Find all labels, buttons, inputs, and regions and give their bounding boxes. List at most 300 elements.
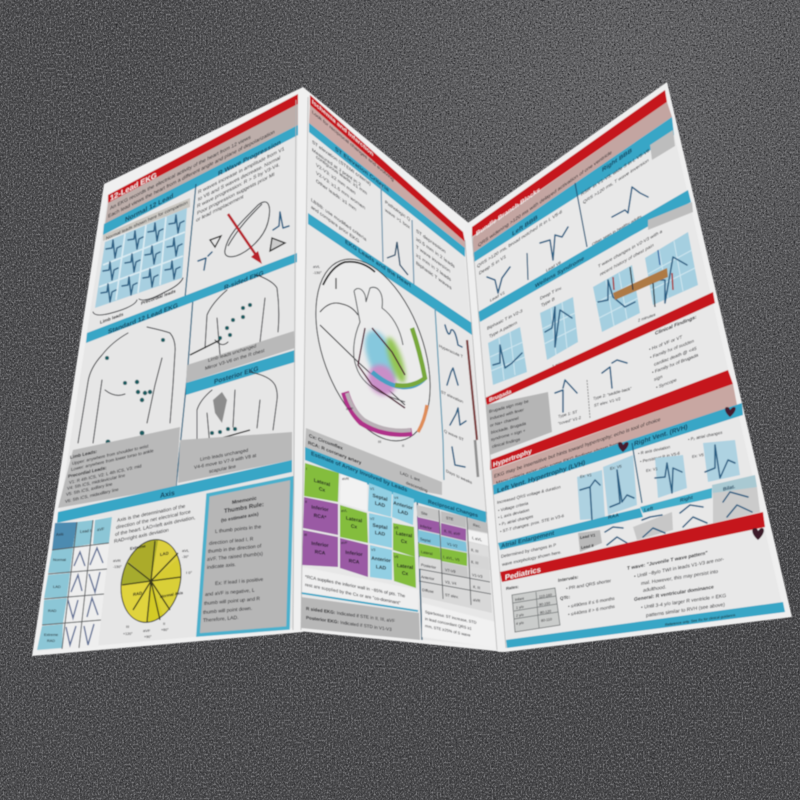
callout: mnemonic thumbs rule: (to estimate axis) [221, 511, 259, 523]
chart: lead territory grid: Lateral [314, 478, 331, 488]
text: limb and precordial lead placement: Precordial Leads: [68, 465, 107, 479]
heading band: Atrial Enlargement: Atrial Enlargement [501, 530, 554, 550]
text: atrial enlargement description: Determined by changes in P [501, 542, 556, 559]
text: wellens criteria: T wave changes in V2-V3 with a [598, 229, 662, 270]
icon: green lateral band [395, 328, 425, 386]
heading band: coronary circulation [308, 213, 472, 335]
table: axis lead I and aVF: RAD [48, 608, 57, 613]
heading: QRS and ST section banner: Look for reciprocal changes and evolving [312, 110, 394, 183]
text: normal 12 lead note: Normal leads shown here for comparison [106, 200, 188, 241]
heading band: Atrial Enlargement [498, 475, 757, 550]
chart: lead territory grid: aVF [341, 541, 348, 545]
diagram: posterior torso placement [190, 372, 277, 447]
table: pediatrics rates: 60-110 [541, 617, 552, 623]
callout: mnemonic thumbs rule: Mnemonic [232, 496, 257, 506]
text: RCA footnote [301, 567, 419, 611]
chart: lead territory grid: RCA [349, 558, 360, 566]
diagram: heart with lead planes: III [378, 439, 381, 444]
chart: axis wheel: aVR [113, 558, 121, 563]
text: Brugada description: clinical findings [492, 437, 520, 449]
text: Brugada clinical findings: sign [654, 374, 663, 383]
table: reciprocal changes: Inferior [420, 524, 433, 531]
text: R-sided note: Limb leads unchanged [208, 343, 257, 364]
chart: axis wheel: I 0° [186, 570, 192, 575]
table: reciprocal changes: STE [446, 516, 454, 522]
text: LVH criteria: • Voltage criteria [498, 500, 529, 513]
wave: Brugada types [555, 360, 632, 426]
icon: heart right [725, 407, 736, 417]
chart: axis wheel: aVF [143, 628, 151, 633]
callout: mnemonic thumbs rule: thumb will point down. [203, 606, 252, 616]
chart: lead territory grid: III [304, 533, 307, 537]
heading band: LBBB and RBBB: Left BBB [512, 214, 538, 238]
heading band: LVH and RVH [493, 403, 743, 495]
text: limb and precordial lead placement: Lower: anywhere from lower torso to ankle [71, 448, 154, 472]
table: pediatrics rates: 1 y/o [516, 605, 524, 610]
text: ST criteria list: contiguous leads: ≥1 mm [316, 154, 367, 197]
wave: Brugada types: Type 1: ST [558, 409, 578, 419]
icon: heart pediatrics [752, 528, 764, 540]
text: LVH criteria: • P₂ atrial changes [499, 514, 533, 527]
text and wave: LBBB: QRS >120 ms, broad notched R in I, V5-6 [477, 209, 562, 270]
panel: middle fold of card [294, 87, 505, 652]
chart: lead territory grid: RCA* [314, 513, 326, 521]
text: R-sided note: Mirror V3-V6 on the R chest [205, 348, 265, 372]
table: reciprocal changes: Rec. [473, 523, 481, 529]
text: Brugada description [486, 392, 552, 455]
chart: axis wheel: +90° [144, 635, 152, 639]
divider [632, 443, 642, 503]
chart: lead territory grid: Lateral [346, 516, 363, 525]
text: Brugada description: or Na+ channel [490, 415, 519, 428]
table: pediatrics rates: 80-120 [540, 609, 551, 615]
callout: mnemonic thumbs rule: thumb will point up and R [204, 596, 260, 607]
table: reciprocal changes: ST elev. [445, 593, 459, 599]
icon: orange arc [418, 405, 427, 432]
chart: axis wheel: aVL [182, 548, 190, 553]
heading band: Posterior EKG: Posterior EKG [214, 366, 258, 386]
heading band: reciprocal changes: Reciprocal Changes [428, 499, 478, 519]
text and wave: LBBB [477, 209, 568, 303]
heading band: Normal 12 Lead and R Wave Progression: R Wave Progression [218, 139, 281, 178]
heading: Hypertrophy [490, 370, 733, 470]
table: reciprocal changes: Lateral [421, 550, 433, 556]
table: axis lead I and aVF [37, 517, 112, 650]
text: reciprocal footnote: mm, STE ≥25% of S wave [425, 623, 471, 638]
wave: atrial morphology table [605, 487, 760, 545]
heading: Brugada: Brugada [489, 389, 512, 404]
table: reciprocal changes: Diffuse [422, 588, 434, 594]
chart: RVH grids: Ex: V5 [692, 452, 704, 459]
folded reference card [32, 82, 792, 656]
chart: lead territory grid: V6 [394, 555, 398, 559]
chart: ECG grid A: 1 minute [500, 384, 516, 395]
chart: lead territory grid: Inferior [311, 541, 329, 549]
chart: lead territory grid: aVL [341, 509, 347, 513]
text: LVH criteria [497, 484, 565, 534]
heading: Hypertrophy: Hypertrophy [493, 448, 532, 469]
heading band: ischemia subsections: ST Elevation Criteria [335, 146, 389, 194]
heading: 12-Lead EKG [105, 94, 298, 224]
heading band: LVH and RVH: Left Vent. Hypertrophy (LVH) [497, 459, 585, 495]
diagram: heart with depolarization arrow [198, 202, 289, 270]
chart: normal 12 lead waveforms grid: Precordial leads [141, 288, 176, 306]
callout: mnemonic thumbs rule: thumb in the direction of [208, 543, 262, 555]
heading: bundle branch block banner [472, 90, 672, 253]
chart: axis wheel: +120° [123, 632, 133, 636]
chart: lead territory grid: Inferior [345, 550, 363, 558]
text: RVH criteria: • P₂ atrial changes [688, 430, 722, 442]
chart: ECG grid B [540, 297, 578, 369]
heading band: Atrial Enlargement: Right [680, 495, 693, 504]
text: Brugada clinical findings: • Hx of VF or VT [649, 334, 682, 353]
callout: mnemonic thumbs rule: and aVF is negative, L [205, 588, 255, 598]
heading band: Axis [57, 460, 292, 523]
text: pediatric intervals: • ≤440ms if > 6 months [568, 604, 616, 617]
icon: heart anatomy outline [354, 287, 425, 408]
heading: bundle branch block banner: QRS widening >120 ms with delayed activation of one ventricle [478, 150, 612, 249]
text: pediatric T waves and dominance: • Until 3-4 y/o larger R ventricle = EKG [641, 593, 726, 611]
text: hypertrophy note: EKG may be insensitive but hints toward hypertrophy; echo is tool of choice [494, 417, 660, 480]
fold shading strips [293, 97, 506, 650]
heading band: Axis: Axis [160, 490, 175, 500]
dividers [527, 183, 587, 280]
chart: lead territory grid: Cx [402, 571, 408, 577]
table: axis lead I and aVF: Extreme [44, 633, 58, 637]
text: RCA footnote: *RCA supplies the inferior wall in ~85% of pts. The [305, 574, 406, 599]
table: reciprocal changes: II, III [471, 560, 478, 565]
text: ST criteria list: ST elevation (STEMI criteria) [312, 139, 371, 188]
text and wave: LBBB: Deep S in V1 [479, 254, 506, 277]
text: hypertrophy note: Many criteria exist; only some EKG findings shown here [496, 441, 620, 487]
chart: lead territory grid: LAD [375, 530, 385, 538]
heading band: Normal 12 Lead and R Wave Progression [103, 125, 298, 235]
icon: magenta inferior arc [345, 392, 412, 433]
wave: Brugada types: ST elev. V1-V2 [594, 396, 621, 408]
chart: axis wheel: LAD [160, 551, 169, 557]
text and wave: RBBB [581, 148, 650, 247]
text: limb and precordial lead placement: V1: R 4th ICS, V2: L 4th ICS, V3: mid [69, 463, 142, 485]
diagram: heart with lead planes: II [402, 443, 404, 448]
footer band [506, 602, 785, 648]
table: axis lead I and aVF: aVF [97, 526, 105, 532]
heading band: Atrial Enlargement: Bilat. [723, 484, 736, 493]
chart: lead territory grid: V2 [370, 517, 374, 521]
text: LVH criteria: • L axis deviation [498, 507, 530, 520]
text: axis definition: RAD=right axis deviation [114, 527, 169, 545]
chart: ECG grid C [593, 265, 640, 332]
text: ST depression subsection [416, 228, 455, 292]
callout: mnemonic thumbs rule: Therefore, LAD. [203, 615, 239, 624]
chart: normal 12 lead waveforms grid [93, 208, 187, 325]
heading: QRS and ST section banner: Ischemia and Infarction [312, 99, 373, 158]
chart: lead territory grid: LAD [398, 509, 408, 518]
text: right sided and posterior note [301, 597, 420, 640]
heading band: Standard 12 Lead and R-sided EKG [86, 253, 297, 343]
table: reciprocal changes [417, 505, 492, 613]
chart: axis wheel: Extreme [130, 543, 146, 551]
text: abbreviations: Cx: Circumflex [309, 433, 343, 452]
text: pediatric T waves and dominance: adulthood. [643, 584, 666, 594]
heading band: Standard 12 Lead and R-sided EKG: R-sided EKG [224, 270, 264, 292]
table: pediatrics rates: Rates: [506, 584, 519, 591]
text: pediatric intervals: • PR and QRS shorter [566, 578, 611, 591]
text: RVH criteria [638, 430, 722, 464]
callout: mnemonic thumbs rule: direction of lead I, R [209, 536, 254, 547]
heading band: Atrial Enlargement: RAA [608, 512, 619, 521]
table: pediatrics rates: 4 y/o [516, 621, 524, 626]
text: R wave progression description: or lead misplacement [196, 194, 244, 224]
text and wave: LBBB: Lead V1 [490, 289, 505, 303]
text: ST depression subsection: ST depression [416, 228, 446, 255]
text: axis definition: Axis is the determination of the [117, 503, 185, 524]
text: ST depression subsection: ≥0.5 mm in 2 leads [416, 236, 455, 270]
text: pediatric T waves and dominance: • Until ~8y/o TWI in leads V1-V3 are nor- [634, 557, 724, 580]
text: R wave progression description: Poor progression suggests prior MI [197, 172, 275, 217]
table: axis lead I and aVF: Normal [53, 557, 66, 562]
chart: axis wheel: -30° [182, 555, 189, 559]
wave: Brugada types: Type 2: "saddle-back" [593, 386, 632, 401]
chart: lead territory grid: V1 [370, 487, 374, 491]
chart: axis wheel [112, 538, 192, 638]
heading: Pediatrics: Pediatrics [505, 565, 541, 582]
text: atrial enlargement description: Lead V1 [580, 532, 596, 540]
text and wave: RBBB: RSR' in V1-V3, wide S in I, V5-V6 [581, 148, 650, 198]
chart: lead territory grid: Cx [351, 523, 357, 531]
text: pediatric T waves and dominance: patterns similar to RVH (see above) [646, 602, 725, 619]
chart: lead territory grid: Cx [319, 486, 325, 494]
diagram: heart with lead planes [294, 244, 452, 456]
panel: ST morphology sub-column [435, 308, 478, 485]
text: posterior note: scapular line [209, 464, 236, 475]
text: wellens criteria [487, 229, 662, 339]
chart: lead territory grid: RCA [315, 549, 326, 557]
table: reciprocal changes: II, III [473, 585, 480, 590]
text: abbreviations: descending [406, 480, 428, 493]
heading band: ischemia subsections [309, 123, 465, 257]
text: RVH criteria: • Persistent R in V5-6 [640, 450, 681, 464]
callout: mnemonic thumbs rule: L thumb points in the [215, 524, 261, 535]
text: right sided and posterior note: R sided EKG: Indicated if STE in II, III, aVF [306, 606, 395, 624]
table: reciprocal changes: II, III, aVF [444, 529, 461, 537]
heading band: estimate of artery involved: Estimate of Artery Involved by Leads [311, 451, 407, 494]
text: limb and precordial lead placement: V6: 5th ICS, midaxillary line [65, 487, 119, 504]
text: posterior note: Limb leads unchanged [200, 448, 248, 463]
text: axis definition: direction of the net electrical force [116, 509, 191, 531]
heading band: Posterior EKG [186, 350, 295, 395]
text: limb and precordial lead placement: Limb Leads: [70, 449, 98, 460]
heading band: LBBB and RBBB: Right BBB [602, 147, 632, 174]
text: abbreviations [305, 428, 442, 495]
text: ST criteria list: and compare prior EKG [311, 204, 359, 245]
arrow: evolution over time [467, 340, 478, 477]
table: reciprocal changes: Anterior [421, 575, 435, 581]
heading band: reciprocal changes [415, 490, 487, 523]
dividers [381, 185, 414, 288]
text: reciprocal footnote: Sgarbossa: ST increase, STD [425, 609, 477, 625]
table: axis lead I and aVF: Axis [56, 531, 64, 537]
text: Brugada description: Brugada sign may be [489, 398, 529, 414]
text: R wave progression description: R waves increase in amplitude from V1 [198, 146, 284, 196]
callout: mnemonic thumbs rule: indicate axis. [207, 562, 236, 571]
heading band: Normal 12 Lead and R Wave Progression: Normal 12 Lead [125, 193, 173, 224]
panel: right fold of card [465, 82, 792, 652]
panel: ST morphology sub-column: Q wave ST [444, 428, 464, 442]
heading band: Atrial Enlargement: Left [644, 506, 653, 514]
text and wave: Q wave subsection: wave >1 box [385, 207, 410, 231]
chart: normal 12 lead waveforms grid: Limb leads [100, 311, 124, 325]
chart: ECG grid B: 1 minute [552, 358, 568, 369]
text: pediatric intervals [558, 574, 616, 617]
table: reciprocal changes: aVR [473, 598, 481, 603]
text: limb and precordial lead placement [58, 427, 180, 508]
text: ST depression subsection: ≥1 mm in 2 leads [416, 252, 451, 283]
chart: ECG grid D [638, 232, 698, 323]
chart: LVH grids [577, 455, 637, 520]
text: Brugada description: induced with fever [490, 407, 524, 421]
text: Brugada description: blockade. Brugada [491, 421, 527, 435]
text: atrial enlargement description: wave morphology shown here. [502, 549, 562, 567]
table: pediatrics rates: Infant [515, 597, 524, 602]
diagram: heart with lead planes: aVL [313, 264, 321, 269]
heading band: Standard 12 Lead and R-sided EKG: Standard 12 Lead EKG [108, 302, 178, 336]
panel: ST morphology sub-column: ST elevation [441, 389, 464, 405]
divider [176, 184, 196, 487]
chart: ECG grid D: 2 minutes [638, 312, 655, 323]
wave: Brugada types: "coved" V1-2 [558, 415, 582, 426]
chart: axis wheel: II [163, 621, 165, 626]
chart: LVH grids: Ex: V1 [580, 472, 592, 479]
text: ST criteria list: Other leads: ≥1 mm [316, 178, 356, 213]
heading band: LBBB and RBBB [473, 117, 675, 262]
text: LVH criteria: • ST-T changes: prox. STE in V3-6 [500, 513, 565, 534]
diagram: heart with lead planes: -150° [313, 271, 322, 275]
text: Brugada clinical findings: cardiac death @ <45 [654, 346, 697, 368]
text: pediatric intervals: QTc: [560, 594, 571, 601]
chart: ECG grid A [488, 327, 527, 395]
chart: lead territory grid: Inferior [311, 505, 329, 514]
text: pediatric intervals: • ≤490ms if ≤ 6 months [568, 596, 615, 609]
panel: ST morphology sub-column: Days to weeks [446, 468, 472, 485]
heading band: coronary circulation: EKG Leads and the Heart [345, 238, 411, 289]
chart: axis wheel: -150° [113, 565, 122, 569]
text: R wave progression description [196, 146, 284, 224]
table: reciprocal changes: V1-V2 [447, 542, 458, 548]
diagram: standard 12 lead torso placement [78, 327, 175, 444]
chart: lead territory grid: Lateral [396, 531, 413, 540]
table: reciprocal changes: V7-V9 [445, 568, 456, 574]
text: ST depression subsection: Biphasic T waves [416, 260, 452, 292]
chart: axis wheel: III [126, 624, 129, 629]
callout: mnemonic thumbs rule [198, 478, 292, 635]
heading band: LVH and RVH: Right Vent. (RVH) [634, 424, 688, 448]
icon: heart [618, 442, 629, 452]
chart: lead territory grid: V3 [371, 548, 375, 552]
heading: 12-Lead EKG: An EKG records the electrical activity of the heart from 12 views [110, 134, 251, 212]
heading: bundle branch block banner: Bundle Branch Blocks [476, 187, 540, 238]
table: pediatrics rates [506, 584, 560, 632]
heading: Brugada [485, 292, 715, 405]
table: reciprocal changes: I, aVL [472, 536, 483, 542]
chart: lead territory grid: Anterior [371, 556, 391, 564]
text: abbreviations: RCA: R coronary artery [308, 440, 362, 466]
text: pediatric T waves and dominance [627, 550, 726, 619]
text: wellens criteria: Biphasic T in V2-3 [487, 308, 523, 331]
text: limb and precordial lead placement: V5: 5th ICS, axillary line [66, 481, 113, 497]
text: limb and precordial lead placement: Upper: anywhere from shoulder to wrist [72, 443, 149, 466]
chart: lead territory grid: Anterior [393, 500, 413, 512]
chart: lead territory grid: LAD [375, 501, 385, 510]
text: ST criteria list: V2-V3: ≥1.5 mm women [316, 170, 365, 212]
text: right sided and posterior note: Posterior EKG: Indicated if STD in V1-V3 [306, 615, 392, 632]
callout: mnemonic thumbs rule: Thumbs Rule: [224, 502, 264, 515]
text: RVH criteria: • R axis deviation [638, 444, 671, 456]
table: pediatrics rates: 90-150 [539, 601, 550, 607]
text: pediatric intervals: Intervals: [558, 574, 579, 583]
chart: lead territory grid: aVR [342, 477, 349, 481]
icon: orange ST segment bar between grids [613, 250, 673, 307]
table: axis lead I and aVF: Lead I [80, 528, 91, 534]
table: reciprocal changes: Site [421, 511, 428, 516]
panel: ST morphology sub-column: Hyperacute T [439, 343, 463, 359]
text: wellens criteria: Type B [541, 296, 555, 308]
panel: left fold of card [32, 87, 308, 656]
text: axis definition: of the heart. LAD=left axis deviation, [115, 515, 195, 538]
chart: lead territory grid: V4 [394, 496, 398, 500]
heading band: WPW section: Wellens Syndrome [535, 256, 585, 290]
chart: lead territory grid [302, 463, 416, 588]
text: R-sided note [186, 331, 295, 383]
text: Brugada clinical findings [649, 314, 699, 391]
heading: QRS and ST section banner [309, 95, 465, 248]
text: LVH criteria: Increased QRS voltage & duration [497, 484, 561, 505]
text: ST criteria list [311, 139, 371, 245]
chart: lead territory grid: Lateral [397, 563, 414, 571]
text: Brugada clinical findings: • Syncope [656, 377, 677, 391]
callout: mnemonic thumbs rule: aVF. The raised thumb(s) [207, 551, 263, 563]
text: Brugada description: syndrome = sign + [491, 428, 526, 442]
table: pediatrics rates: 2 y/o [516, 613, 524, 618]
chart: lead territory grid: I [306, 467, 307, 471]
diagram: R-sided torso placement [190, 275, 279, 355]
chart: RVH grids [646, 440, 740, 498]
table: pediatrics rates: 110-160 [539, 593, 552, 599]
chart: lead territory grid: LAD [376, 564, 387, 572]
text: atrial enlargement description: Lead II [581, 543, 594, 550]
text: ST criteria list: V2-V3: ≥2 mm men [316, 162, 356, 197]
callout: mnemonic thumbs rule: Ex: If lead I is positive [215, 577, 263, 587]
text: pediatric T waves and dominance: T wave: "Juvenile T wave pattern" [627, 550, 708, 572]
text: ST depression subsection: T wave inversion [416, 244, 450, 275]
heading: Pediatrics [500, 512, 765, 582]
chart: lead territory grid: Septal [373, 493, 388, 503]
table: reciprocal changes: V3, V4 [445, 580, 457, 586]
text: posterior note: V4-6 move to V7-9 with V8 at [194, 453, 257, 471]
text: Brugada clinical findings: • Family hx of sudden [650, 338, 694, 361]
text: R wave progression description: R wave progression: R > S by V3-V4. [197, 162, 280, 210]
text: reciprocal footnote [422, 603, 497, 648]
text: Brugada clinical findings: • Family hx of Brugada [652, 352, 699, 376]
heading: 12-Lead EKG: 12-Lead EKG [110, 171, 157, 203]
chart: LVH grids: Ex: V5 [610, 463, 622, 471]
text: wellens criteria: Type A pattern [489, 320, 517, 339]
chart: lead territory grid: V5 [394, 526, 398, 530]
text: wellens criteria: Deep T inv. [540, 285, 562, 301]
text: reciprocal footnote: in lead concordant QRS ≥1 [425, 616, 472, 631]
table: axis lead I and aVF: RAD [47, 639, 55, 643]
chart: lead territory grid: Cx [401, 538, 407, 546]
text: ST criteria list: LBBB: use modified criteria [311, 197, 366, 243]
